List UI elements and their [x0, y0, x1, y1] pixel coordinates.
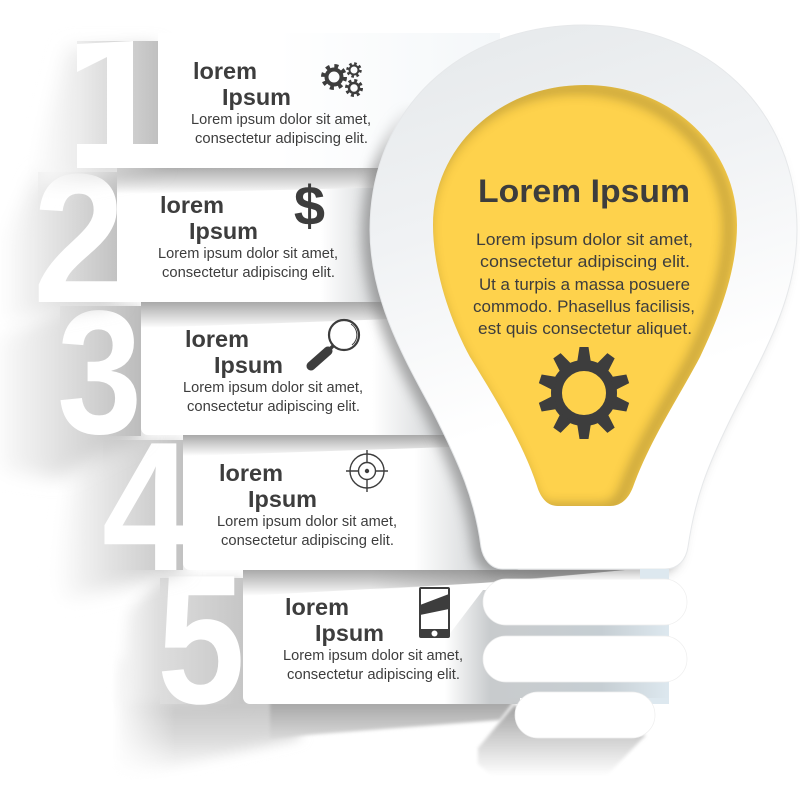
number 3: 3 [57, 274, 142, 470]
bulb heading: Lorem Ipsum [478, 173, 690, 209]
number 5: 5 [157, 538, 245, 743]
heading: step 5 [285, 594, 384, 646]
icon: magnifying glass [311, 320, 359, 366]
bulb text: est quis consectetur aliquet. [478, 320, 692, 338]
heading: step 4: lorem [219, 460, 283, 486]
bulb text: Lorem ipsum dolor sit amet, [476, 231, 693, 249]
heading: step 2: lorem [160, 192, 224, 218]
bulb text: consectetur adipiscing elit. [480, 253, 690, 271]
icon: smartphone [420, 588, 449, 638]
text: step 2: consectetur adipiscing elit. [162, 265, 335, 281]
text: step 3: Lorem ipsum dolor sit amet, [183, 380, 363, 396]
icon: gears [323, 64, 362, 96]
bulb text: commodo. Phasellus facilisis, [473, 298, 695, 316]
text: step 2 [158, 246, 338, 281]
heading: step 3: Ipsum [214, 352, 283, 378]
heading: step 3 [185, 326, 283, 378]
heading: step 1: Ipsum [222, 84, 291, 110]
screw ring 1 [483, 579, 687, 625]
panel: step 2 [5, 137, 417, 342]
panel: light bulb [370, 25, 797, 569]
text: step 3 [183, 380, 363, 415]
bulb body [370, 25, 797, 569]
text: step 5 [283, 648, 463, 683]
number 4: 4 [102, 403, 192, 609]
bulb yellow window [433, 85, 737, 506]
text: step 4 [217, 514, 397, 549]
heading: step 4 [219, 460, 317, 512]
text: step 5: Lorem ipsum dolor sit amet, [283, 648, 463, 664]
text: step 4: Lorem ipsum dolor sit amet, [217, 514, 397, 530]
bulb text [473, 231, 695, 338]
text: step 5: consectetur adipiscing elit. [287, 667, 460, 683]
icon: large gear [538, 347, 630, 439]
text: step 1 [191, 112, 371, 147]
panel: step 5 [120, 570, 624, 766]
heading: step 5: Ipsum [315, 620, 384, 646]
icon: target [346, 450, 388, 492]
heading: step 5: lorem [285, 594, 349, 620]
panel: step 3 [0, 274, 481, 478]
text: step 1: Lorem ipsum dolor sit amet, [191, 112, 371, 128]
panel: step 1 [40, 33, 500, 186]
text: step 4: consectetur adipiscing elit. [221, 533, 394, 549]
text: step 2: Lorem ipsum dolor sit amet, [158, 246, 338, 262]
text: step 1: consectetur adipiscing elit. [195, 131, 368, 147]
icon: dollar sign: $ [294, 174, 325, 237]
bulb base: screw rings [478, 569, 687, 776]
bulb text: Ut a turpis a massa posuere [479, 276, 690, 294]
heading: step 2 [160, 192, 258, 244]
screw ring 2 [483, 636, 687, 682]
heading: step 2: Ipsum [189, 218, 258, 244]
heading: step 4: Ipsum [248, 486, 317, 512]
heading: step 1: lorem [193, 58, 257, 84]
heading: step 3: lorem [185, 326, 249, 352]
number 1: 1 [80, 18, 165, 203]
heading: step 1 [193, 58, 291, 110]
text: step 3: consectetur adipiscing elit. [187, 399, 360, 415]
bulb shadow on the panels [355, 110, 788, 578]
screw ring 3 [515, 692, 655, 738]
panel: step 4 [58, 403, 523, 609]
number 2: 2 [33, 137, 125, 342]
